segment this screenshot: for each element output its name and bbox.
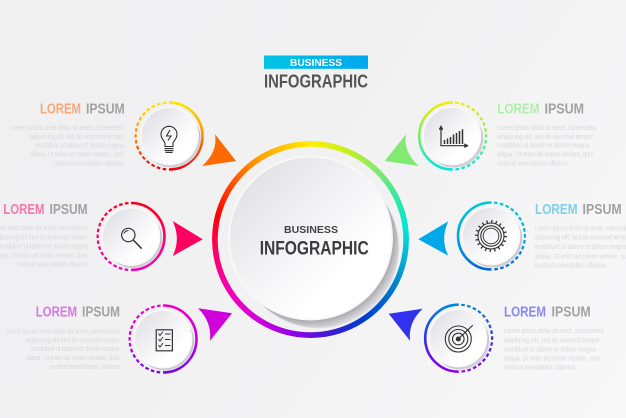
panel: middle left xyxy=(0,202,164,270)
arrow: middle left xyxy=(173,221,203,256)
arrow: bottom right xyxy=(389,309,423,341)
panel: top left xyxy=(10,102,202,170)
body text xyxy=(0,223,88,268)
node ring and disc xyxy=(98,203,164,270)
panel: middle right xyxy=(458,202,626,270)
body text xyxy=(6,326,120,371)
panel: bottom right xyxy=(425,304,604,372)
node ring and disc xyxy=(136,102,202,170)
node ring and disc xyxy=(425,305,492,372)
icon: magnifier xyxy=(122,228,142,249)
icon: checklist xyxy=(156,330,172,351)
heading: IPSUM xyxy=(82,305,120,321)
body text: adipiscing elit sed do eiusmod tempor xyxy=(30,132,124,141)
node ring and disc xyxy=(419,102,486,170)
heading: LOREM xyxy=(3,202,45,218)
body text: aliqua. Ut enim ad minim veniam, quis xyxy=(30,150,124,159)
body text: Lorem ipsum amet dolor sit amet, consectetur xyxy=(6,326,120,335)
body text: Lorem ipsum amet dolor sit amet, consectetur xyxy=(10,123,124,132)
central title: INFOGRAPHIC xyxy=(260,238,369,259)
icon: target xyxy=(445,325,473,352)
panel: top right xyxy=(419,102,598,170)
node ring and disc xyxy=(458,202,525,270)
body text xyxy=(535,224,626,270)
body text: incididunt ut labore et dolore magna xyxy=(35,141,125,150)
body text: incididunt ut labore et dolore magna xyxy=(497,141,590,150)
top title xyxy=(264,56,368,91)
body text: incididunt ut labore et dolore magna xyxy=(30,344,120,353)
body text xyxy=(497,123,598,168)
heading: IPSUM xyxy=(50,202,88,218)
heading: IPSUM xyxy=(552,304,591,320)
body text: incididunt ut labore et dolore magna xyxy=(0,241,88,250)
body text: nostrud exercitation ullamco xyxy=(504,363,575,372)
icon: gear xyxy=(476,222,506,250)
heading: LOREM xyxy=(40,102,81,118)
body text: aliqua. Ut enim ad minim veniam, quis xyxy=(26,353,120,362)
heading: LOREM xyxy=(535,202,578,218)
panel: bottom left xyxy=(6,305,196,372)
heading: LOREM xyxy=(36,305,77,321)
icon: light bulb xyxy=(161,126,177,152)
body text: nostrud exercitation ullamco xyxy=(497,159,568,168)
heading: IPSUM xyxy=(544,102,584,118)
body text: adipiscing elit, sed do eiusmod tempor xyxy=(497,132,594,141)
central title xyxy=(260,224,369,259)
arrow: bottom left xyxy=(198,308,232,341)
arrow: top right xyxy=(385,134,419,166)
heading: IPSUM xyxy=(86,102,125,118)
node ring and disc xyxy=(130,306,196,372)
top title: INFOGRAPHIC xyxy=(264,70,368,91)
body text: nostrud exercitation ullamco xyxy=(50,362,120,371)
heading: LOREM xyxy=(504,304,546,320)
body text: nostrud exercitation ullamco xyxy=(54,159,124,168)
top title: BUSINESS xyxy=(290,57,342,69)
icon: bar chart xyxy=(439,126,468,148)
central disc xyxy=(228,156,399,328)
body text: adipiscing elit sed do eiusmod tempor xyxy=(26,335,120,344)
body text xyxy=(504,326,604,372)
heading: LOREM xyxy=(497,102,540,118)
body text: nostrud exercitation ullamco xyxy=(18,259,88,268)
body text: incididunt ut labore et dolore magna xyxy=(504,344,597,353)
central rainbow ring xyxy=(212,141,409,338)
central title: BUSINESS xyxy=(284,224,338,236)
arrow: middle right xyxy=(418,221,448,256)
body text: nostrud exercitation ullamco xyxy=(535,261,606,270)
arrow: top left xyxy=(202,134,236,166)
body text xyxy=(10,123,125,168)
body text: aliqua. Ut enim ad minim veniam, quis xyxy=(497,150,593,159)
